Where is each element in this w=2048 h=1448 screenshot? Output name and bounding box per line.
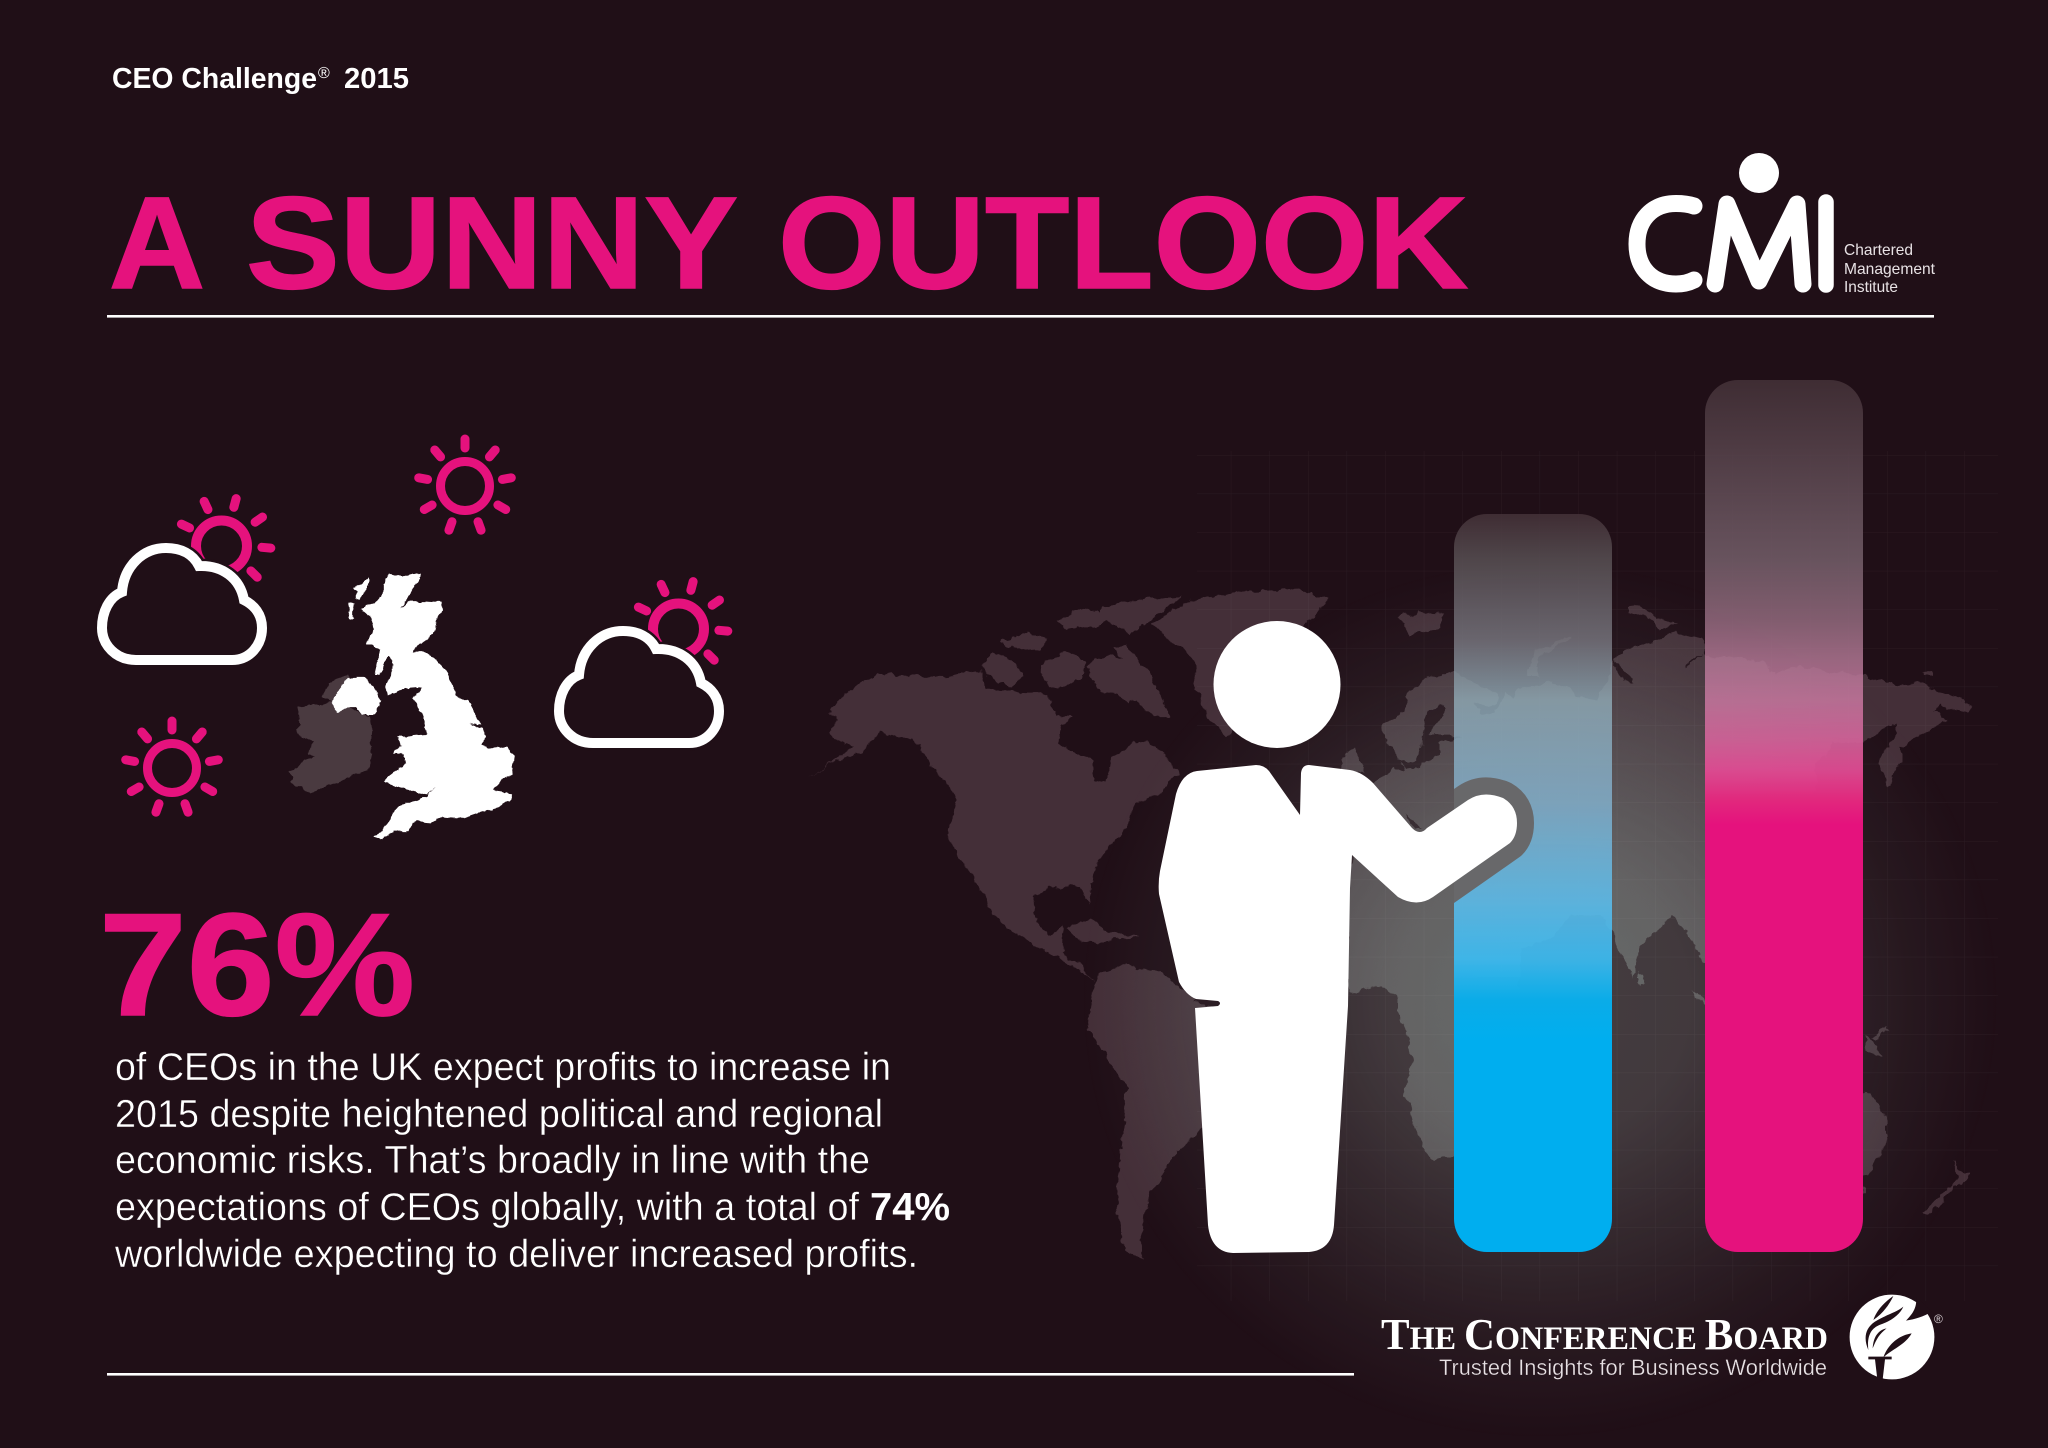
eyebrow: CEO Challenge 2015: ® bbox=[318, 65, 330, 82]
logo: Chartered Management Institute: Management bbox=[1844, 261, 1936, 278]
title: SUNNY bbox=[246, 169, 738, 316]
icon: sun with cloud, left bbox=[102, 499, 271, 660]
icon: sun, bottom left bbox=[126, 721, 218, 812]
eyebrow: CEO Challenge 2015: CEO Challenge bbox=[112, 63, 317, 95]
title: OUTLOOK bbox=[778, 169, 1468, 316]
text: body paragraph: 74% bbox=[870, 1186, 950, 1229]
text: body paragraph: economic risks. That’s broadly in line with the bbox=[115, 1139, 870, 1182]
arm halo on bar bbox=[1417, 794, 1517, 905]
title: A bbox=[109, 169, 205, 316]
text: body paragraph: expectations of CEOs globally, with a total of bbox=[115, 1186, 859, 1229]
background glow bbox=[1080, 560, 2000, 1440]
logo: The Conference Board: Trusted Insights for Business Worldwide bbox=[1439, 1355, 1827, 1380]
text: 76%: 76% bbox=[99, 883, 415, 1046]
bar: UK blue bbox=[1454, 514, 1612, 1252]
logo: Chartered Management Institute: Institute bbox=[1844, 279, 1898, 296]
eyebrow: CEO Challenge 2015: 2015 bbox=[344, 63, 409, 95]
map: world bbox=[807, 589, 1972, 1260]
icon: sun, top bbox=[419, 439, 511, 530]
icon: sun with cloud, right bbox=[559, 582, 728, 743]
logo: The Conference Board bbox=[1381, 1295, 1943, 1380]
text: body paragraph: worldwide expecting to deliver increased profits. bbox=[114, 1233, 918, 1276]
text: body paragraph: 2015 despite heightened political and regional bbox=[115, 1093, 883, 1136]
map: UK and Ireland bbox=[288, 573, 514, 840]
logo: Chartered Management Institute: Chartered bbox=[1844, 242, 1913, 259]
logo: The Conference Board: ® bbox=[1934, 1312, 1943, 1326]
logo: Chartered Management Institute bbox=[1637, 153, 1936, 296]
text: body paragraph bbox=[114, 1046, 950, 1276]
eyebrow: CEO Challenge 2015 bbox=[112, 63, 409, 95]
text: body paragraph: of CEOs in the UK expect profits to increase in bbox=[115, 1046, 891, 1089]
title bbox=[109, 169, 1468, 316]
icon: presenter figure bbox=[1159, 621, 1517, 1253]
bar: global pink bbox=[1705, 380, 1863, 1252]
logo: The Conference Board: THE CONFERENCE BOARD bbox=[1381, 1310, 1828, 1359]
grid bbox=[1197, 451, 1998, 1301]
